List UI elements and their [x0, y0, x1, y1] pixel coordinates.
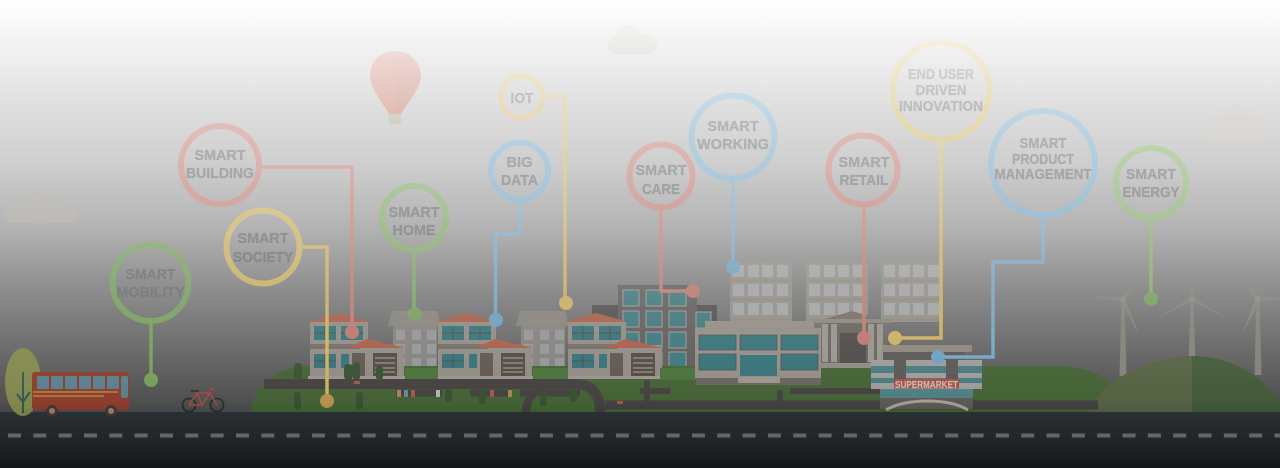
- callout: smart working: [692, 96, 774, 274]
- pale background high-rises: [730, 260, 943, 322]
- parked cars: [354, 381, 623, 404]
- callout: big data: [489, 142, 548, 327]
- callout: big data: DATA: [501, 172, 538, 189]
- trees and shrubs: [294, 362, 577, 409]
- row of houses: [307, 313, 664, 379]
- callout: smart society: SOCIETY: [233, 249, 293, 266]
- wind turbines: [1085, 259, 1280, 376]
- cloud right: [1204, 104, 1270, 140]
- callout: smart building: BUILDING: [186, 165, 254, 182]
- callout: end user driven innovation: INNOVATION: [899, 99, 983, 115]
- callout: smart mobility: SMART: [126, 266, 176, 283]
- callout: smart mobility: MOBILITY: [116, 284, 184, 301]
- bus: [32, 372, 129, 417]
- callout: smart care: SMART: [636, 162, 686, 179]
- cloud top centre: [608, 25, 657, 54]
- callout: iot: IOT: [510, 90, 534, 107]
- callout: end user driven innovation: END USER: [908, 67, 974, 83]
- callout: smart product management: PRODUCT: [1012, 152, 1074, 168]
- callout: smart society: SMART: [238, 230, 288, 247]
- cloud left: [5, 192, 78, 224]
- callout: smart energy: [1116, 148, 1186, 306]
- callout: big data: BIG: [506, 154, 532, 171]
- supermarket: [871, 345, 982, 410]
- callout: end user driven innovation: DRIVEN: [916, 83, 966, 99]
- callout: smart mobility: [112, 245, 188, 387]
- callout: smart home: SMART: [388, 204, 440, 221]
- callout: smart building: SMART: [194, 147, 246, 164]
- callout: smart retail: SMART: [838, 154, 890, 171]
- callout: smart building: [181, 126, 359, 339]
- callout: smart working: SMART: [708, 118, 758, 135]
- callout: smart home: [382, 186, 446, 321]
- callout: iot: [500, 76, 573, 310]
- callout: smart working: WORKING: [697, 136, 769, 153]
- tree: [5, 348, 41, 416]
- road: [0, 412, 1280, 468]
- callout: smart product management: SMART: [1020, 136, 1067, 152]
- callout: end user driven innovation: [888, 42, 990, 345]
- bank with columns: [815, 311, 891, 368]
- callout: smart retail: RETAIL: [840, 172, 888, 189]
- callout: smart retail: [828, 136, 898, 345]
- tall apartment building: [592, 285, 717, 370]
- hot air balloon: [370, 51, 421, 124]
- bicycle: [182, 389, 224, 412]
- supermarket: SUPERMARKET: [895, 380, 958, 391]
- callout: smart product management: [931, 111, 1095, 364]
- callout: smart society: [226, 210, 334, 408]
- office building: [695, 321, 821, 385]
- callout: smart care: [630, 144, 700, 298]
- green ground and hills: [251, 356, 1280, 412]
- pale background houses: [388, 311, 569, 370]
- roads in ground: [264, 380, 1098, 412]
- callout: smart energy: SMART: [1126, 166, 1176, 183]
- callout: smart energy: ENERGY: [1122, 184, 1180, 201]
- callout: smart care: CARE: [642, 181, 680, 198]
- hedges between houses: [405, 368, 696, 380]
- callout: smart home: HOME: [392, 222, 436, 239]
- callout: smart product management: MANAGEMENT: [994, 167, 1092, 183]
